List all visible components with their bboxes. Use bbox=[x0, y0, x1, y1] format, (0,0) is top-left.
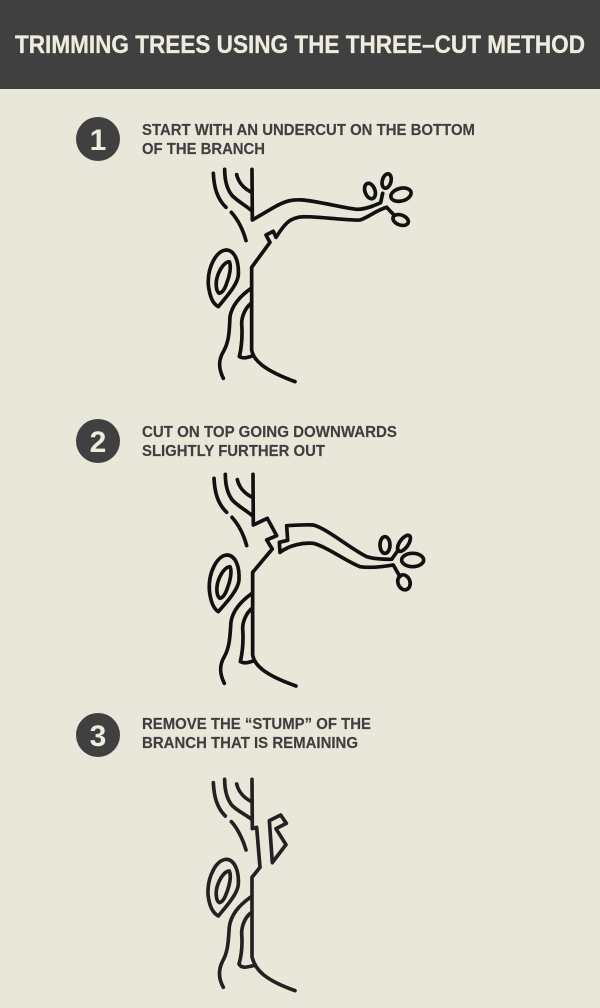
illustration: tree with stump removed bbox=[208, 779, 295, 991]
step 2 number badge bbox=[76, 419, 120, 463]
step 1 instruction: START WITH AN UNDERCUT ON THE BOTTOM bbox=[142, 122, 475, 139]
step 3 heading bbox=[76, 713, 371, 757]
step 2 instruction: CUT ON TOP GOING DOWNWARDS bbox=[142, 424, 397, 441]
leaves bbox=[363, 173, 413, 227]
step 2 heading bbox=[76, 419, 397, 463]
step 1 number badge bbox=[76, 117, 120, 161]
step 3 number badge: 3 bbox=[90, 720, 106, 753]
header banner bbox=[0, 0, 600, 89]
step 3 instruction: BRANCH THAT IS REMAINING bbox=[142, 735, 358, 752]
step 2 number badge: 2 bbox=[90, 426, 106, 459]
leaves bbox=[380, 533, 424, 592]
step 1 heading bbox=[76, 117, 475, 161]
step 2 instruction: SLIGHTLY FURTHER OUT bbox=[142, 443, 325, 460]
illustration: tree with top cut separating branch bbox=[209, 474, 424, 686]
removed stump piece bbox=[269, 815, 286, 863]
step 3 number badge bbox=[76, 713, 120, 757]
step 3 instruction: REMOVE THE “STUMP” OF THE bbox=[142, 716, 371, 733]
illustration: tree with undercut on branch bbox=[208, 169, 413, 382]
step 1 number badge: 1 bbox=[90, 124, 106, 157]
step 1 instruction: OF THE BRANCH bbox=[142, 141, 265, 158]
